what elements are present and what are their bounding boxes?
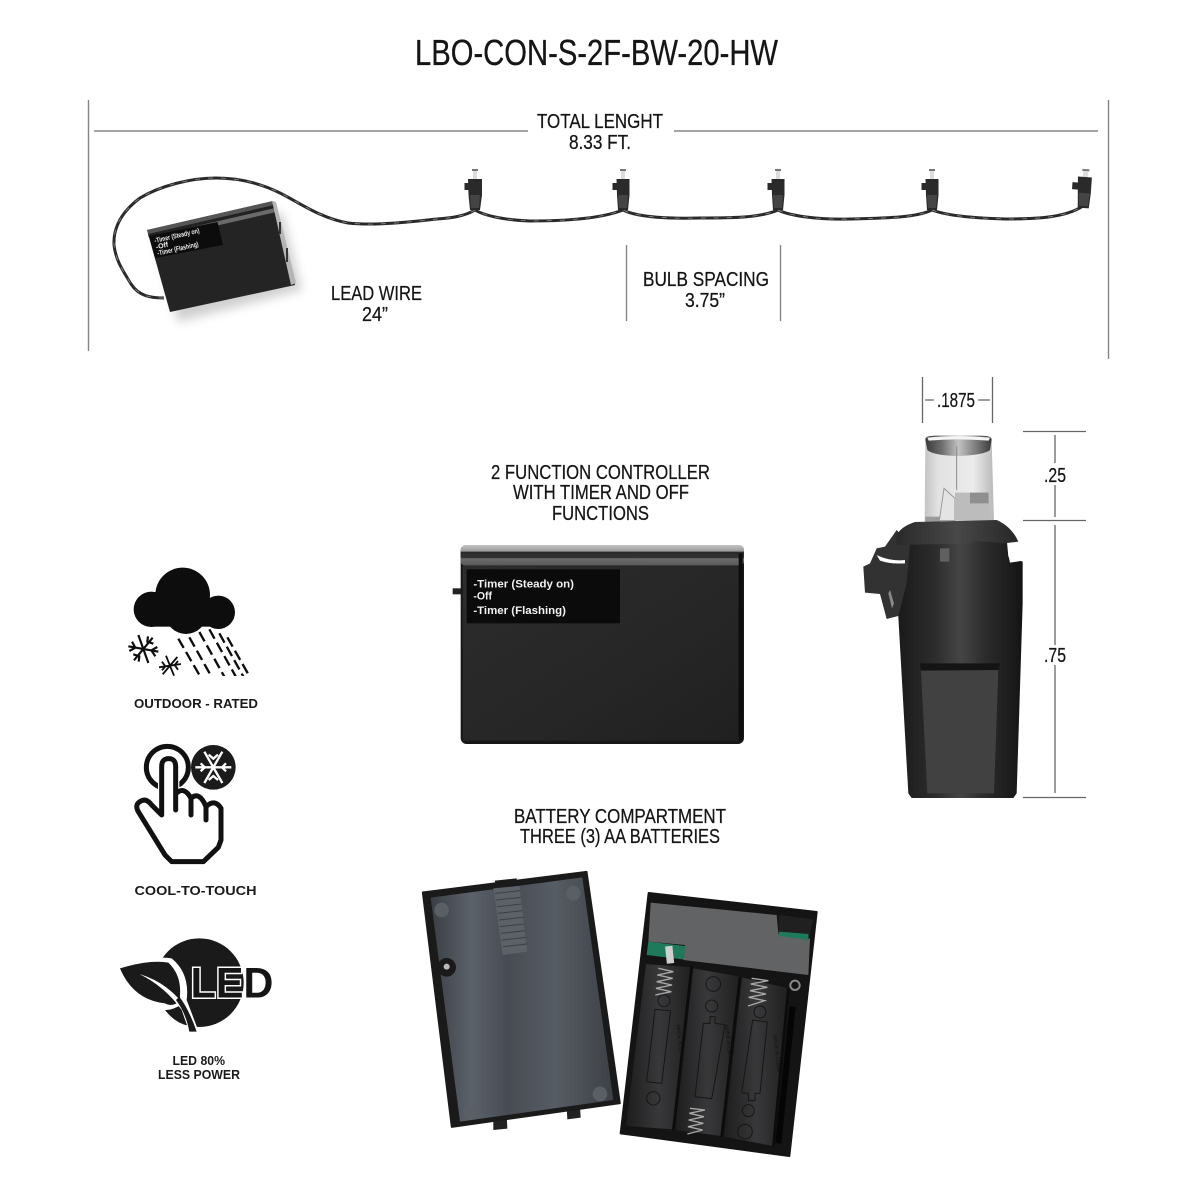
label: total length: TOTAL LENGHT [537,110,663,133]
hand [137,759,221,862]
bulb 5 [1071,168,1092,208]
dimension: lens width: .1875 [937,389,975,412]
heading: controller [491,461,710,525]
leaf [120,962,180,1005]
dimension: lens width [922,377,992,423]
dimension: bulb spacing: BULB SPACING [643,268,769,291]
label: LED power: LESS POWER [158,1067,241,1082]
press ring [146,746,188,788]
label: lead wire: 24” [362,303,388,326]
rain [177,628,249,676]
heading: controller: 2 FUNCTION CONTROLLER [491,461,710,484]
lid screw [437,958,456,977]
bulb 1 [464,169,482,210]
small controller: -Timer (Steady on) [154,228,200,245]
small controller: -Off [155,242,170,251]
icon: cool to touch [137,745,236,862]
dimension: lens height and body height: .25 [1044,464,1066,487]
icon: outdoor rated [128,568,249,685]
snow badge [191,745,236,790]
label: outdoor rated: OUTDOOR - RATED [134,696,258,711]
dimension: bulb spacing [626,245,780,321]
heading: battery compartment: BATTERY COMPARTMENT [514,805,726,828]
label: lead wire: LEAD WIRE [331,282,422,305]
bulb 2 [612,169,630,210]
moulded text: MADE IN CHINA [675,1025,685,1063]
heading: controller: WITH TIMER AND OFF [513,481,689,504]
moulded text: MADE IN CHINA [723,1025,733,1063]
dimension: bulb spacing: 3.75” [685,289,725,312]
large bulb photo [863,436,1023,798]
battery lid [423,872,620,1130]
dividers [673,966,788,1147]
label: total length: 8.33 FT. [569,131,631,154]
cloud [134,568,235,634]
springs [655,968,768,1134]
battery tray [621,893,817,1156]
leaf cut-out [117,958,200,1035]
label: cool to touch: COOL-TO-TOUCH [134,883,256,898]
small controller [147,201,302,322]
switch [453,588,461,594]
snowflake small [159,656,181,676]
slots [626,964,788,1146]
battery slots detail [647,977,767,1139]
controller label: -Timer (Steady on) [473,578,574,590]
label: lead wire [331,282,422,326]
dimension: total length [88,100,1108,359]
wire [114,178,1083,298]
snowflake large [128,635,158,663]
dimension: lens height and body height: .75 [1044,644,1066,667]
title: LBO-CON-S-2F-BW-20-HW [415,32,778,73]
bulb 4 [922,169,938,210]
controller photo [453,545,744,744]
heading: controller: FUNCTIONS [552,502,649,525]
LED letters: LED [191,959,273,1007]
dimension: lens height and body height [1023,432,1086,798]
moulded text [675,1025,781,1073]
controller case [461,545,744,744]
label: LED power [158,1053,241,1082]
circuit board [647,915,813,964]
small controller: -Timer (Flashing) [157,241,199,258]
controller label: -Off [473,590,492,602]
bulb base [863,520,1023,798]
label: LED power: LED 80% [172,1053,225,1068]
icon: LED leaf [117,938,273,1035]
label: total length [537,110,663,154]
bulb 3 [768,169,784,210]
heading: battery compartment [514,805,726,848]
controller label [467,569,620,623]
lens [925,436,994,523]
controller label: -Timer (Flashing) [473,605,566,617]
moulded text: MADE IN CHINA [771,1035,781,1073]
light string photo [114,168,1092,322]
battery compartment photo [423,872,817,1156]
heading: battery compartment: THREE (3) AA BATTERIES [520,825,720,848]
disc [155,938,244,1027]
